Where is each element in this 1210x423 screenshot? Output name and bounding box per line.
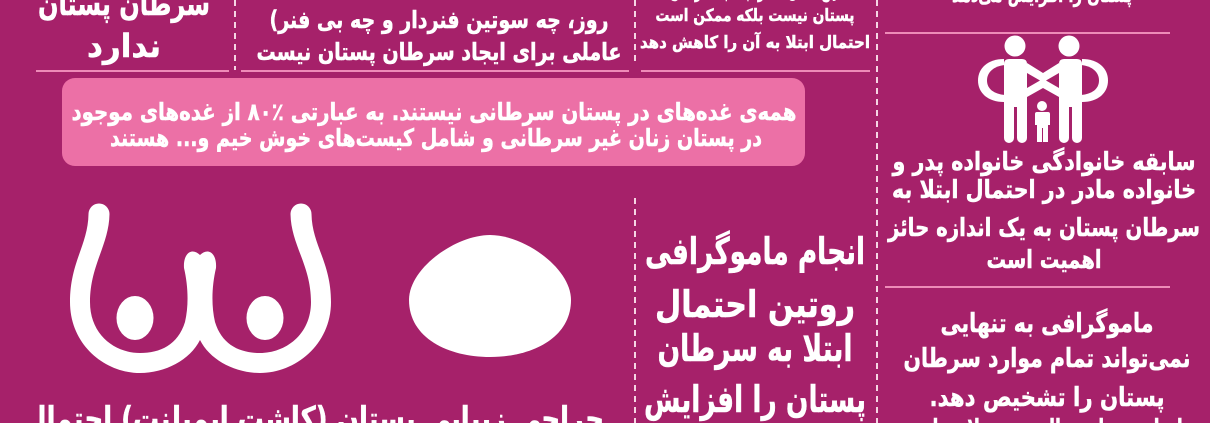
text block: mammography alone: پستان را تشخیص دهد. [930, 383, 1164, 413]
text block: mammography alone [897, 308, 1197, 423]
text block: top left fact [38, 0, 210, 65]
text block: exercise fact: احتمال ابتلا به آن را کاهش دهد [640, 31, 870, 53]
text block: bra fact: عاملی برای ایجاد سرطان پستان نیست [256, 38, 622, 66]
text block: family history [886, 147, 1200, 274]
text block: bra fact: روز، چه سوتین فنردار و چه بی فنر) [270, 6, 608, 34]
text block: routine mammography: ابتلا به سرطان [658, 327, 852, 370]
icon: family [978, 36, 1108, 143]
text block: routine mammography: انجام ماموگرافی [645, 230, 865, 274]
text block: bra fact [256, 6, 622, 66]
callout: pink lumps note: همه‌ی غده‌های در پستان سرطانی نیستند. به عبارتی ٪۸۰ از غده‌های موجود [72, 98, 797, 126]
icon: implant [409, 235, 571, 357]
icon: breast outline [70, 204, 331, 373]
text block: routine mammography [644, 230, 866, 421]
text block: exercise fact [640, 0, 870, 53]
text block: exercise fact: پستان نیست بلکه ممکن است [656, 6, 854, 26]
callout: pink lumps note [62, 78, 805, 166]
text block: family history: اهمیت است [986, 245, 1102, 274]
text block: top left fact: ندارد [87, 27, 161, 65]
text block: routine mammography: پستان را افزایش [644, 378, 866, 421]
callout: pink lumps note: در پستان زنان غیر سرطانی و شامل کیست‌های خوش خیم و... هستند [110, 124, 762, 152]
text block: routine mammography: روتین احتمال [655, 283, 855, 326]
text block: mammography alone: ماموگرافی به تنهایی [940, 308, 1154, 339]
